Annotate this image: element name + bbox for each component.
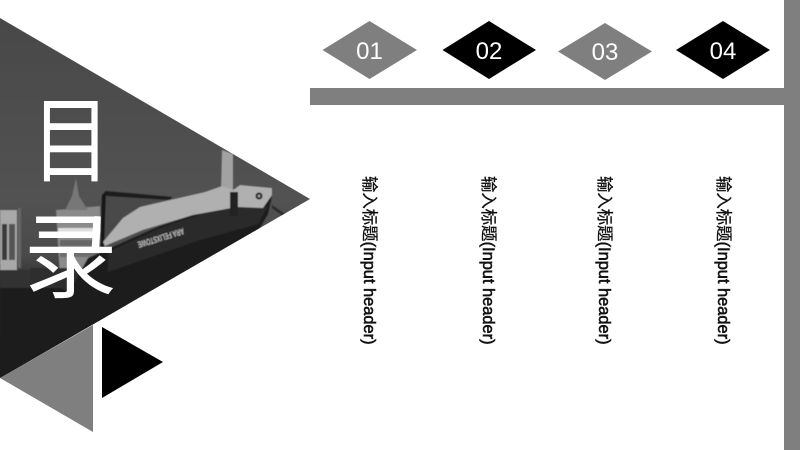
- diamond 03: [558, 23, 652, 80]
- photo: ship white bulwark: [103, 185, 272, 246]
- label 4: 输入标题 (Input header): [714, 176, 732, 345]
- label 1: 输入标题 (Input header): [360, 176, 378, 345]
- icon: black triangle: [102, 327, 163, 398]
- panel: photo triangle with ship: [0, 18, 310, 378]
- title: 目录: [23, 90, 118, 310]
- photo: ship deck section: [100, 191, 172, 250]
- photo: quay foreground: [0, 288, 78, 378]
- icon: grey triangle: [0, 325, 93, 432]
- photo: bow emblem: [256, 192, 262, 200]
- title character 录: 录: [23, 205, 118, 310]
- label 3: 输入标题 (Input header): [595, 176, 613, 345]
- title character 目: 目: [32, 90, 110, 195]
- diamond 02: 02: [476, 38, 502, 65]
- photo: ship dark panel: [230, 192, 238, 210]
- diamond 04: 04: [710, 38, 736, 65]
- photo: mooring line: [272, 205, 285, 216]
- diamond 01: [322, 21, 417, 79]
- label 2: 输入标题 (Input header): [479, 176, 497, 345]
- photo: ship funnel mast: [221, 150, 233, 192]
- diamond 01: 01: [356, 38, 383, 65]
- diamond 03: 03: [592, 39, 618, 66]
- diamond 02: [442, 21, 536, 79]
- horizontal bar: [310, 88, 784, 105]
- diamond 04: [676, 21, 770, 79]
- photo: ship hull: [73, 197, 272, 322]
- photo: distant ship superstructure: [30, 178, 102, 290]
- photo: port buildings: [0, 208, 30, 288]
- photo: ship name: ARA FELIXSTOWE: [137, 226, 185, 250]
- right vertical bar: [784, 0, 800, 450]
